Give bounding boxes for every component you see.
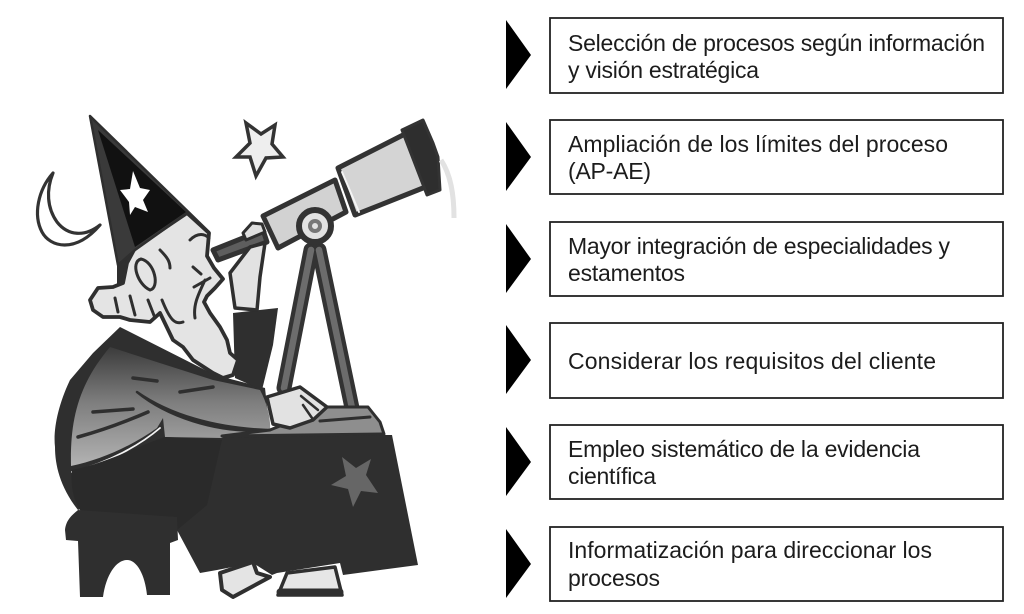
table top bbox=[222, 407, 384, 436]
step 3: arrow and box: Mayor integración de especialidades y bbox=[568, 233, 950, 259]
wizard head and beard bbox=[90, 213, 238, 378]
step 2: arrow and box bbox=[506, 120, 1003, 194]
step 3: arrow and box bbox=[506, 222, 1003, 296]
telescope tripod bbox=[284, 250, 352, 408]
step 4: arrow and box: Considerar los requisitos del cliente bbox=[568, 348, 936, 374]
step 5: arrow and box: Empleo sistemático de la evidencia bbox=[568, 436, 920, 462]
wizard coat and sleeve bbox=[55, 308, 278, 510]
telescope tube bbox=[213, 120, 440, 260]
icon: cloth star bbox=[331, 457, 378, 507]
illustration: wizard with telescope bbox=[38, 116, 454, 597]
wizard shoes bbox=[220, 562, 342, 597]
step 2: arrow and box: Ampliación de los límites del proceso bbox=[568, 131, 948, 157]
wizard resting hand bbox=[267, 387, 327, 428]
stool bbox=[65, 510, 178, 597]
step 1: arrow and box bbox=[506, 18, 1003, 93]
icon: star outline bbox=[236, 123, 283, 176]
step 2: arrow and box: (AP-AE) bbox=[568, 158, 651, 184]
icon: hat star bbox=[120, 171, 150, 215]
icon: crescent moon bbox=[38, 173, 100, 245]
step 1: arrow and box: y visión estratégica bbox=[568, 57, 759, 83]
step 6: arrow and box: Informatización para direccionar los bbox=[568, 537, 932, 563]
table cloth bbox=[177, 435, 418, 575]
step 5: arrow and box bbox=[506, 425, 1003, 499]
wizard trousers bbox=[72, 437, 222, 560]
wizard hat bbox=[90, 116, 209, 265]
step 3: arrow and box: estamentos bbox=[568, 260, 685, 286]
step 1: arrow and box: Selección de procesos según información bbox=[568, 30, 985, 56]
step 5: arrow and box: científica bbox=[568, 463, 656, 489]
step 6: arrow and box bbox=[506, 527, 1003, 601]
wizard raised hand bbox=[230, 223, 265, 310]
step 4: arrow and box bbox=[506, 323, 1003, 398]
step 6: arrow and box: procesos bbox=[568, 565, 660, 591]
telescope light streak bbox=[441, 160, 454, 218]
